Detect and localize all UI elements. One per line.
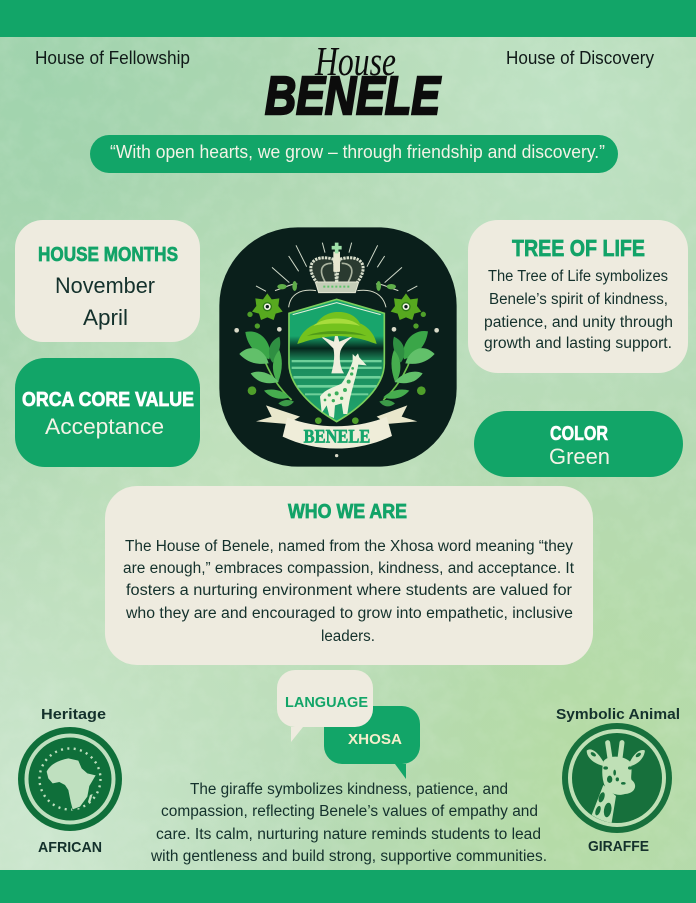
giraffe description: care. Its calm, nurturing nature reminds students to lead bbox=[156, 826, 541, 843]
giraffe label: GIRAFFE bbox=[588, 838, 649, 855]
speech bubble: xhosa: XHOSA bbox=[348, 732, 403, 748]
panel: who we are: are enough,” embraces compassion, kindness, and acceptance. It bbox=[123, 560, 575, 577]
panel: tree of life: The Tree of Life symbolizes bbox=[488, 268, 668, 285]
panel: tree of life bbox=[468, 220, 688, 373]
speech bubble: xhosa bbox=[324, 706, 420, 779]
small ornaments bbox=[234, 312, 439, 457]
motto pill bbox=[90, 135, 618, 173]
tree bbox=[297, 312, 377, 373]
title logotype: House bbox=[314, 38, 396, 84]
bottom band bbox=[0, 870, 696, 903]
title logotype: BENELE bbox=[265, 66, 442, 126]
crown bbox=[311, 243, 363, 293]
panel: house months: November bbox=[55, 273, 155, 298]
flower right bbox=[391, 293, 421, 320]
ribbon bbox=[256, 405, 417, 449]
speech bubble: language bbox=[277, 670, 373, 742]
shield stripes bbox=[292, 360, 382, 395]
panel: tree of life: growth and lasting support. bbox=[484, 335, 672, 352]
shield bbox=[289, 299, 384, 422]
giraffe description bbox=[150, 781, 547, 865]
scrolls bbox=[275, 284, 398, 307]
giraffe description: compassion, reflecting Benele’s values of empathy and bbox=[161, 803, 538, 820]
house crest bbox=[219, 227, 457, 467]
panel: orca core value: ORCA CORE VALUE bbox=[22, 389, 194, 411]
ribbon: BENELE bbox=[304, 427, 370, 448]
panel: color bbox=[474, 411, 683, 477]
panel: who we are: fosters a nurturing environment where students are valued for bbox=[126, 582, 572, 599]
panel: who we are: who they are and encouraged to grow into empathetic, inclusive bbox=[125, 605, 573, 622]
laurel left bbox=[239, 331, 294, 406]
giraffe description: with gentleness and build strong, supportive communities. bbox=[150, 848, 547, 865]
top band bbox=[0, 0, 696, 37]
crest rays bbox=[256, 243, 417, 291]
laurel right bbox=[379, 331, 435, 406]
panel: orca core value: Acceptance bbox=[45, 414, 164, 439]
panel: tree of life: TREE OF LIFE bbox=[512, 235, 645, 261]
panel: house months: HOUSE MONTHS bbox=[38, 244, 178, 266]
icon: giraffe badge bbox=[562, 723, 672, 833]
panel: house months bbox=[15, 220, 200, 342]
symbolic animal label: Symbolic Animal bbox=[556, 706, 680, 723]
title logotype bbox=[265, 38, 442, 126]
giraffe bbox=[320, 353, 367, 418]
flower left bbox=[252, 293, 283, 320]
small leaves by crown bbox=[277, 281, 396, 291]
panel: tree of life: Benele’s spirit of kindness, bbox=[489, 291, 668, 308]
heritage label: Heritage bbox=[41, 706, 106, 723]
panel: house months: April bbox=[83, 305, 128, 330]
panel: who we are: The House of Benele, named from the Xhosa word meaning “they bbox=[125, 538, 573, 555]
panel: who we are bbox=[105, 486, 593, 665]
giraffe description: The giraffe symbolizes kindness, patience, and bbox=[190, 781, 508, 798]
panel: color: Green bbox=[549, 444, 610, 469]
shield highlight line bbox=[293, 303, 381, 315]
speech bubble: language: LANGUAGE bbox=[285, 695, 368, 711]
header: House of Fellowship: House of Fellowship bbox=[35, 48, 190, 68]
african label: AFRICAN bbox=[38, 839, 102, 856]
panel: tree of life: patience, and unity through bbox=[484, 314, 673, 331]
motto pill: “With open hearts, we grow – through friendship and discovery.” bbox=[110, 142, 605, 162]
panel: who we are: WHO WE ARE bbox=[288, 501, 407, 523]
icon: african heritage badge bbox=[18, 727, 122, 831]
panel: who we are: leaders. bbox=[321, 628, 375, 645]
panel: orca core value bbox=[15, 358, 200, 467]
giraffe spots bbox=[324, 367, 354, 402]
header: House of Discovery: House of Discovery bbox=[506, 48, 654, 68]
panel: color: COLOR bbox=[550, 423, 608, 445]
